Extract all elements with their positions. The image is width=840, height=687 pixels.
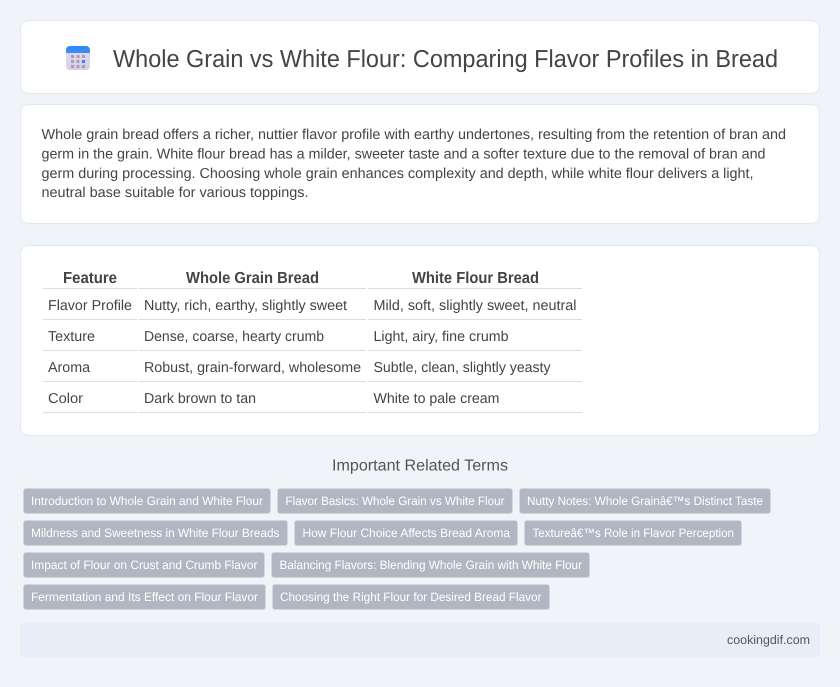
- tag: How Flour Choice Affects Bread Aroma: [302, 526, 510, 540]
- related term tags: [24, 488, 770, 610]
- tag: Introduction to Whole Grain and White Flour: [31, 494, 263, 508]
- table row: flavor profile: [48, 298, 576, 314]
- footer: [20, 623, 820, 657]
- tag: [24, 584, 266, 610]
- table row: color: Color: [48, 391, 83, 407]
- tag: Impact of Flour on Crust and Crumb Flavor: [31, 558, 258, 572]
- table row: color: White to pale cream: [374, 391, 500, 407]
- tag: Balancing Flavors: Blending Whole Grain with White Flour: [280, 558, 582, 572]
- tag: [294, 520, 518, 546]
- table row: texture: Dense, coarse, hearty crumb: [144, 329, 324, 345]
- table row: texture: [48, 329, 508, 345]
- tag: [24, 552, 264, 578]
- tag: Nutty Notes: Whole Grainâ€™s Distinct Taste: [527, 494, 763, 508]
- tag: [272, 552, 590, 578]
- footer: cookingdif.com: [727, 633, 810, 647]
- tag: [24, 520, 288, 546]
- table row: color: Dark brown to tan: [144, 391, 256, 407]
- table row: aroma: [48, 360, 551, 376]
- table row: flavor profile: Nutty, rich, earthy, slightly sweet: [144, 298, 347, 314]
- table row: flavor profile: Flavor Profile: [48, 298, 132, 314]
- panel: intro paragraph: [20, 104, 820, 224]
- tag: [278, 488, 512, 514]
- table row: aroma: Robust, grain-forward, wholesome: [144, 360, 361, 376]
- table header: White Flour Bread: [412, 270, 539, 287]
- table row: aroma: Subtle, clean, slightly yeasty: [374, 360, 551, 376]
- tag: Mildness and Sweetness in White Flour Breads: [31, 526, 280, 540]
- tag: [24, 488, 270, 514]
- tag: Fermentation and Its Effect on Flour Flavor: [31, 590, 258, 604]
- tag: [520, 488, 770, 514]
- table header: [63, 270, 539, 287]
- tag: [272, 584, 550, 610]
- tag: Textureâ€™s Role in Flavor Perception: [532, 526, 734, 540]
- text block: intro: Whole grain bread offers a richer, nuttier flavor profile with earthy undertones, resulting from the retention of bran and: [42, 127, 786, 143]
- text block: intro: [42, 127, 786, 201]
- table row: texture: Texture: [48, 329, 95, 345]
- text block: intro: neutral base suitable for various toppings.: [42, 185, 308, 201]
- panel: comparison table: [20, 246, 820, 436]
- title: Whole Grain vs White Flour: Comparing Flavor Profiles in Bread: [113, 46, 778, 73]
- panel: header: [20, 20, 820, 94]
- table row: texture: Light, airy, fine crumb: [374, 329, 508, 345]
- heading: related terms: Important Related Terms: [332, 458, 508, 474]
- table header: Whole Grain Bread: [186, 270, 319, 287]
- table header: Feature: [63, 270, 117, 287]
- table row: color: [48, 391, 500, 407]
- table row: aroma: Aroma: [48, 360, 90, 376]
- icon: calendar: [66, 46, 90, 70]
- tag: [524, 520, 742, 546]
- text block: intro: germ during processing. Choosing whole grain enhances complexity and depth, while white flour delivers a light,: [42, 166, 754, 182]
- tag: Flavor Basics: Whole Grain vs White Flour: [286, 494, 504, 508]
- text block: intro: germ in the grain. White flour bread has a milder, sweeter taste and a softer texture due to the removal of bran and: [42, 146, 766, 162]
- table row: flavor profile: Mild, soft, slightly sweet, neutral: [374, 298, 576, 314]
- tag: Choosing the Right Flour for Desired Bread Flavor: [280, 590, 542, 604]
